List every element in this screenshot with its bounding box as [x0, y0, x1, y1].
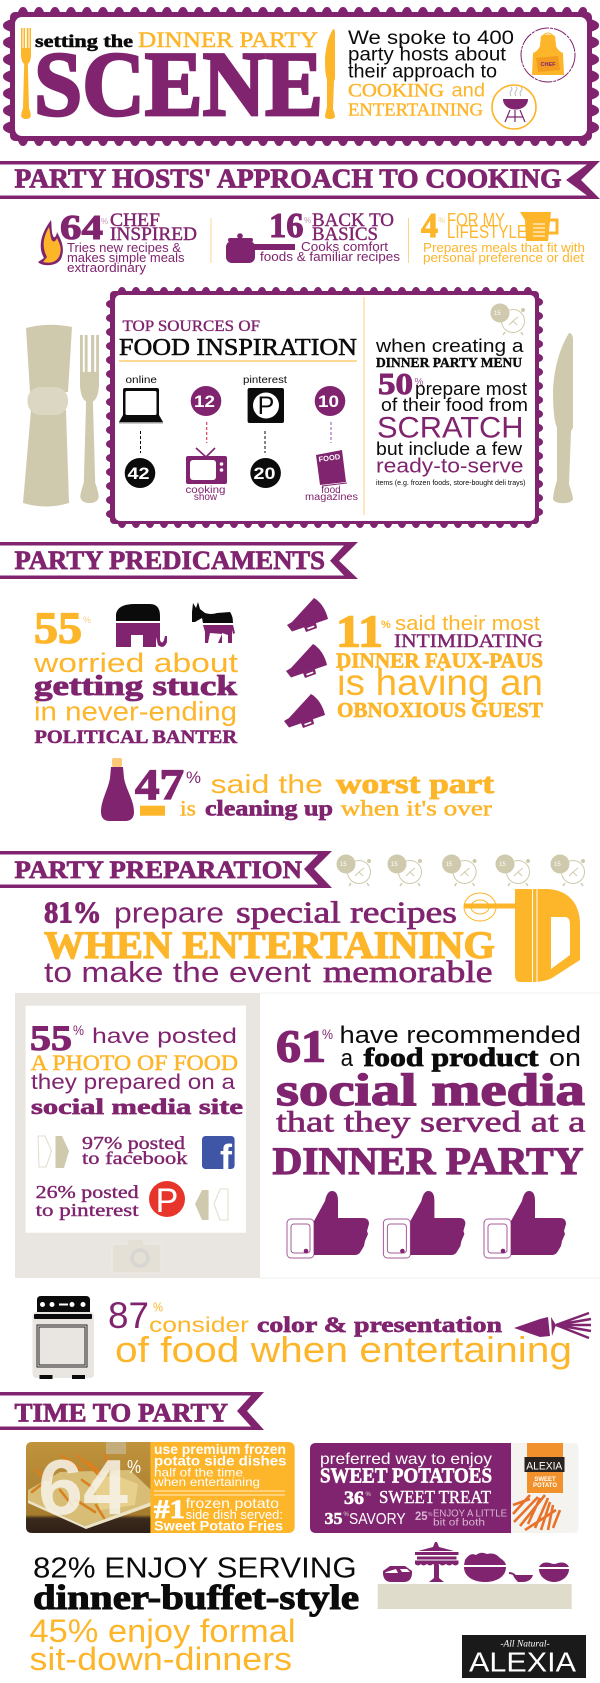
panel: chef inspired stat: [38, 208, 197, 275]
label: food magazines: magazines: [305, 492, 358, 503]
stat: 25 percent both: ENJOY A LITTLE: [433, 1509, 507, 1520]
text: number one sweet potato fries: #1: [154, 1495, 185, 1524]
icon: pinterest: P: [156, 1182, 178, 1220]
icon: camera: [112, 1240, 161, 1273]
panel: 61 percent social media: [272, 1021, 586, 1258]
stat: 35 percent savory: SAVORY: [349, 1511, 406, 1528]
stat: 25 percent both: bit of both: [433, 1518, 485, 1529]
text: social media: social media: [276, 1064, 585, 1115]
text: worst part: cleaning up: [205, 796, 333, 821]
text: 81 percent prepare special recipes: [44, 895, 495, 989]
icon: dinner knife: [553, 333, 573, 503]
panel: back to basics stat: %: [304, 216, 311, 225]
text: 81 percent prepare special recipes: memorable: [323, 954, 492, 989]
panel: for my lifestyle stat: %: [438, 216, 445, 225]
icon: pinterest tile: P: [258, 392, 274, 420]
text: when creating a dinner party menu: but include a few: [376, 439, 523, 459]
icon: facebook: f: [220, 1137, 233, 1178]
heading: chef inspired: INSPIRED: [110, 224, 197, 245]
panel: header: [3, 7, 599, 146]
text: 87 percent consider color and presentation: 87: [108, 1295, 149, 1336]
icon: laptop: [119, 388, 163, 424]
stat: 4 percent: 4: [421, 206, 438, 245]
banner: party predicaments: [0, 542, 358, 579]
description: makes simple meals: [67, 251, 184, 265]
text: 82 percent enjoy serving dinner buffet style: dinner-buffet-style: [33, 1578, 359, 1617]
text: premium frozen potato side dishes: [153, 1442, 286, 1489]
icon: pinterest tile: [248, 388, 284, 423]
icon: fork: [21, 28, 31, 119]
stat: 12 percent: [191, 386, 221, 416]
text: intimidating faux-paus: [336, 613, 543, 722]
text: 81 percent prepare special recipes: prepare: [114, 898, 224, 930]
panel: food inspiration placemat: [106, 287, 543, 528]
intro text: party hosts about: [348, 45, 507, 66]
text: 55 percent have posted: they prepared on a: [31, 1071, 235, 1094]
icons: row of clocks: [336, 854, 585, 886]
icon: pinterest: [149, 1181, 185, 1220]
icon: apron: CHEF: [541, 62, 556, 68]
icon: salad bowl: [464, 1553, 506, 1582]
label: cooking show: show: [194, 492, 218, 503]
text: 97 percent posted to facebook: [82, 1133, 188, 1168]
stat: 35 percent savory: %: [344, 1512, 350, 1518]
heading: chef inspired: [110, 210, 197, 245]
text: worried about getting stuck: [33, 648, 239, 748]
icon: donkey: [192, 602, 235, 643]
text: 81 percent prepare special recipes: WHEN ENTERTAINING: [44, 924, 495, 967]
text: 87 percent consider color and presentation: of food when entertaining: [115, 1329, 572, 1370]
text: 26 percent posted to pinterest: [36, 1182, 139, 1220]
text: number one sweet potato fries: [154, 1495, 283, 1534]
description: foods & familiar recipes: [260, 250, 400, 264]
heading: back to basics: [312, 210, 394, 245]
panel: social media photo: [15, 993, 260, 1278]
stat: 47 percent: [135, 762, 201, 809]
text: have recommended a food product on: have recommended: [340, 1022, 581, 1049]
heading: for my lifestyle: [447, 210, 527, 242]
text: that they served at a: that they served at a: [276, 1106, 586, 1139]
panel: political banter stat: %: [83, 615, 91, 625]
icon: food magazine: [316, 450, 347, 486]
icons: thumbs up: [287, 1191, 566, 1258]
text: worried about getting stuck: in never-ending: [34, 697, 237, 727]
panel: sweet potatoes preference: [310, 1443, 579, 1533]
text: premium frozen potato side dishes: potato side dishes: [154, 1454, 286, 1469]
stat: 64 percent overlay: %: [127, 1457, 141, 1477]
stat: 10 percent: [315, 386, 345, 416]
logo: alexia: [462, 1635, 586, 1678]
icon: megaphones: [284, 598, 328, 728]
text: intimidating faux-paus: is having an: [337, 662, 543, 703]
photo: fries on a plate: [26, 1442, 151, 1533]
text: worried about getting stuck: worried about: [33, 648, 239, 678]
text: worst part: said the: [210, 769, 323, 799]
logo: alexia: ALEXIA: [469, 1647, 576, 1678]
text: when creating a dinner party menu: when creating a: [375, 336, 525, 356]
stat: 42 percent: [125, 458, 155, 488]
text: intimidating faux-paus: OBNOXIOUS GUEST: [337, 698, 543, 722]
text: 45 percent enjoy formal dinners: sit-down-dinners: [30, 1641, 292, 1677]
icon: basket: [383, 1566, 412, 1582]
icon: gravy boat: [509, 1572, 533, 1582]
icon: oven: [32, 1296, 94, 1379]
text: 55 percent have posted: social media site: [31, 1094, 243, 1119]
illustration: buffet table: [378, 1542, 572, 1609]
text: worried about getting stuck: POLITICAL BANTER: [34, 727, 237, 748]
icon: dinner fork: [80, 335, 99, 503]
panel: frozen potato side dishes: [26, 1442, 295, 1534]
text: when creating a dinner party menu: 50: [378, 366, 413, 401]
text: worst part: when it's over: [341, 796, 493, 821]
panel: cleaning up stat: [101, 758, 495, 821]
icon: sponge: [140, 806, 165, 816]
label: cooking show: cooking: [186, 485, 226, 496]
text: 87 percent consider color and presentation: consider: [149, 1314, 249, 1337]
text: preferred way: SWEET POTATOES: [320, 1464, 492, 1488]
icon: photo frames left: [38, 1136, 69, 1168]
intro text: COOKING: [348, 81, 444, 102]
icon: clock: [490, 304, 525, 335]
icon: dish soap bottle: [101, 758, 134, 821]
heading: for my lifestyle: LIFESTYLE: [447, 222, 527, 242]
icon: cake stand: [415, 1542, 458, 1582]
icon: facebook: [202, 1136, 235, 1178]
text: 26 percent posted to pinterest: 26% posted: [36, 1182, 139, 1202]
text: 81 percent prepare special recipes: to make the event: [44, 957, 311, 989]
stat: 12 percent: 12: [194, 392, 215, 411]
stat: 11 percent: 11: [336, 606, 383, 657]
text: 97 percent posted to facebook: 97% posted: [82, 1133, 185, 1153]
description: [67, 241, 184, 275]
text: number one sweet potato fries: Sweet Potato Fries: [154, 1519, 283, 1534]
text: worst part: [180, 769, 495, 821]
stat: 47 percent: %: [186, 768, 201, 787]
text: 87 percent consider color and presentation: color & presentation: [257, 1312, 502, 1337]
text: preferred way: preferred way to enjoy: [320, 1451, 492, 1468]
icon: apron: [521, 28, 575, 82]
stat: 25 percent both: [415, 1509, 507, 1529]
stat: 20 percent: 20: [254, 464, 276, 483]
icon: knife: [325, 29, 335, 119]
text: when creating a dinner party menu: %: [414, 377, 424, 388]
banner: time to party: TIME TO PARTY: [14, 1398, 228, 1428]
text: have recommended a food product on: [340, 1022, 581, 1072]
heading: chef inspired: CHEF: [110, 210, 160, 231]
label: online: online: [126, 375, 158, 386]
stat: 36 percent sweet treat: %: [366, 1492, 372, 1498]
text: 97 percent posted to facebook: to facebook: [82, 1148, 188, 1168]
text: when creating a dinner party menu: of their food from: [381, 395, 528, 415]
text: 82 percent enjoy serving dinner buffet style: 82% ENJOY SERVING: [33, 1553, 357, 1585]
description: Prepares meals that fit with: [423, 241, 585, 255]
text: 55 percent have posted: %: [73, 1022, 84, 1038]
text: 45 percent enjoy formal dinners: 45% enjoy formal: [30, 1613, 296, 1649]
text: have recommended a food product on: a: [341, 1045, 354, 1072]
icon: hand mixer: [464, 889, 580, 982]
text: when creating a dinner party menu: items (e.g. frozen foods, store-bought deli trays): [376, 478, 526, 487]
description: personal preference or diet: [423, 251, 585, 265]
text: intimidating faux-paus: DINNER FAUX-PAUS: [336, 649, 543, 673]
icon: grill: [492, 85, 536, 129]
description: Tries new recipes &: [67, 241, 182, 255]
banner: party predicaments: PARTY PREDICAMENTS: [14, 546, 325, 575]
banner: party preparation: [0, 851, 332, 888]
label: food magazines: food: [321, 485, 341, 496]
stat: 42 percent: 42: [128, 464, 150, 483]
stat: 64 percent: 64: [60, 208, 103, 247]
stat: 10 percent: 10: [318, 392, 339, 411]
stat: 35 percent savory: [324, 1509, 406, 1528]
icon: napkin: [23, 325, 72, 506]
stat: 55 percent: 55: [34, 604, 82, 653]
image: alexia sweet potato package: SWEET: [534, 1477, 556, 1483]
panel: back to basics stat: [226, 206, 400, 264]
panel: chef inspired stat: %: [101, 217, 108, 226]
text: 87 percent consider color and presentation: %: [153, 1300, 163, 1315]
intro text: We spoke to 400: [348, 28, 514, 49]
heading: top sources of food inspiration: [119, 318, 357, 362]
text: have recommended a food product on: on: [549, 1045, 581, 1072]
text: when creating a dinner party menu: ready-to-serve: [376, 455, 524, 478]
heading: back to basics: BACK TO: [312, 210, 394, 231]
label: pinterest: pinterest: [243, 375, 287, 386]
description: Cooks comfort: [301, 240, 389, 254]
stat: 20 percent: [250, 458, 281, 488]
text: premium frozen potato side dishes: when entertaining: [153, 1475, 260, 1489]
text: number one sweet potato fries: frozen potato: [186, 1495, 279, 1511]
text: intimidating faux-paus: INTIMIDATING: [394, 631, 543, 652]
intro text: their approach to: [348, 61, 497, 82]
text: when creating a dinner party menu: SCRATCH: [377, 412, 524, 445]
panel: 87 percent presentation: [32, 1295, 591, 1379]
banner: party preparation: PARTY PREPARATION: [14, 855, 303, 884]
text: 81 percent prepare special recipes: 81%: [44, 895, 101, 930]
stat: 36 percent sweet treat: [344, 1487, 491, 1509]
icon: measuring cup: [520, 212, 557, 241]
stat: 61 percent: 61: [276, 1021, 326, 1072]
image: alexia sweet potato package: [511, 1443, 579, 1533]
logo: alexia: -All Natural-: [500, 1640, 550, 1650]
text: 26 percent posted to pinterest: to pinterest: [36, 1200, 139, 1220]
text: when creating a dinner party menu: prepare most: [415, 379, 527, 399]
text: have recommended a food product on: food product: [364, 1043, 539, 1072]
text: 45 percent enjoy formal dinners: [30, 1613, 296, 1677]
panel: obnoxious guest stat: %: [381, 619, 391, 631]
text: 55 percent have posted: 55: [30, 1018, 72, 1058]
text: 55 percent have posted: [30, 1018, 243, 1119]
icon: food magazine: FOOD: [318, 452, 341, 464]
text: when creating a dinner party menu: DINNER PARTY MENU: [376, 356, 522, 371]
icon: pot: [226, 233, 295, 263]
text: 87 percent consider color and presentation: [108, 1295, 572, 1370]
text: worst part: is: [180, 796, 196, 821]
heading: setting the: setting the: [35, 31, 133, 51]
stat: 35 percent savory: 35: [324, 1509, 342, 1528]
stat: 16 percent: 16: [269, 206, 304, 245]
text: 81 percent prepare special recipes: special recipes: [236, 895, 457, 930]
intro text: and: [452, 81, 485, 102]
icon: carrot: [514, 1313, 591, 1338]
banner: party hosts' approach to cooking: PARTY HOSTS' APPROACH TO COOKING: [14, 164, 562, 194]
banner: time to party: [0, 1392, 264, 1430]
stat: 36 percent sweet treat: SWEET TREAT: [379, 1487, 491, 1507]
description: [423, 241, 585, 265]
stat: 36 percent sweet treat: 36: [344, 1488, 364, 1509]
title: scene: SCENE: [34, 33, 323, 135]
stat: 25 percent both: 25: [415, 1509, 428, 1523]
stat: 25 percent both: %: [428, 1512, 433, 1518]
heading: for my lifestyle: FOR MY: [447, 210, 505, 230]
icon: television: [186, 448, 227, 484]
icon: photo frames right: [195, 1189, 228, 1220]
heading: back to basics: BASICS: [312, 224, 378, 245]
description: [260, 240, 400, 264]
text: premium frozen potato side dishes: use premium frozen: [154, 1442, 286, 1457]
heading: top sources of food inspiration: FOOD INSPIRATION: [119, 335, 357, 361]
description: extraordinary: [67, 261, 147, 275]
text: premium frozen potato side dishes: half of the time: [154, 1466, 243, 1480]
icon: flame: [38, 220, 63, 265]
image: alexia sweet potato package: ALEXIA: [526, 1460, 563, 1472]
text: 55 percent have posted: A PHOTO OF FOOD: [31, 1050, 238, 1075]
text: preferred way: [320, 1451, 492, 1488]
text: intimidating faux-paus: said their most: [395, 613, 540, 635]
panel: obnoxious guest stat: [284, 598, 543, 728]
text: worried about getting stuck: getting stuck: [34, 671, 238, 702]
text: 55 percent have posted: have posted: [92, 1025, 237, 1048]
image: alexia sweet potato package: POTATO: [533, 1483, 557, 1489]
text: worst part: worst part: [336, 769, 495, 800]
text: number one sweet potato fries: side dish served:: [186, 1507, 283, 1522]
heading: top sources of food inspiration: TOP SOURCES OF: [122, 318, 260, 335]
panel: political banter stat: [33, 602, 239, 748]
stat: 64 percent overlay: 64: [38, 1443, 128, 1531]
text: when creating a dinner party menu: [375, 336, 528, 487]
panel: for my lifestyle stat: [421, 206, 585, 265]
label: cooking show: [186, 485, 226, 503]
icon: small bowl: [539, 1562, 569, 1582]
heading: dinner party: DINNER PARTY: [138, 27, 318, 52]
intro text: [348, 28, 514, 120]
stat: 61 percent: %: [322, 1026, 333, 1042]
text: dinner party: DINNER PARTY: [272, 1140, 584, 1183]
intro text: ENTERTAINING: [348, 100, 483, 120]
icon: elephant: [116, 604, 167, 647]
label: food magazines: [305, 485, 358, 503]
stat: 47 percent: 47: [135, 762, 184, 809]
text: 82 percent enjoy serving dinner buffet style: [33, 1553, 359, 1617]
